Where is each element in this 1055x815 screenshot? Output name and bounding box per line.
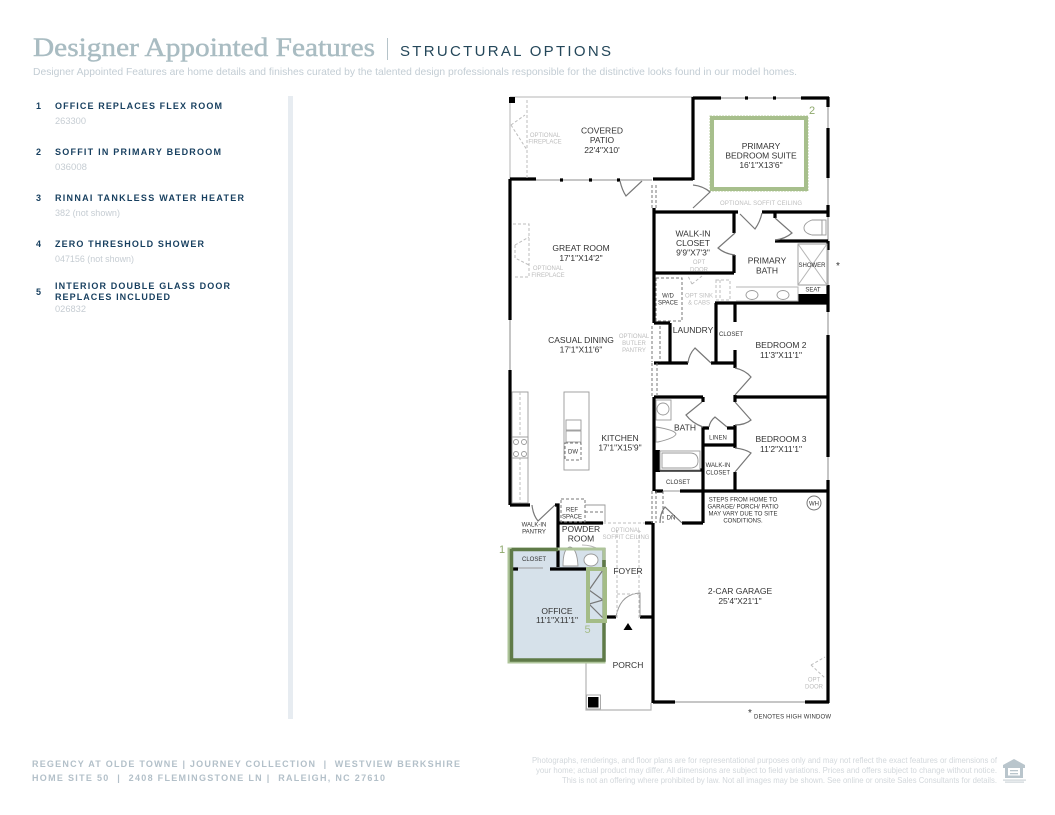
covered patio outline [510, 97, 693, 180]
room labels: PATIO [590, 135, 615, 145]
room labels: PRIMARY [742, 141, 781, 151]
option 5: 5 [36, 287, 41, 297]
footer: disclaimer: your home; actual product may differ. All dimensions are subject to field variations. Prices and offers subject to change without notice. [536, 765, 997, 775]
room labels: 16'1"X13'6" [739, 160, 783, 170]
room labels: KITCHEN [601, 433, 639, 443]
room labels: 11'1"X11'1" [536, 615, 578, 625]
room labels: BUTLER [622, 341, 647, 347]
title: Designer Appointed Features [33, 33, 375, 62]
option 5 highlight: double door [588, 569, 605, 621]
dashed optional walls [511, 100, 730, 618]
door swings [518, 181, 792, 617]
room labels: POWDER [562, 524, 600, 534]
room labels: 9'9"X7'3" [676, 248, 710, 258]
room labels: W/D [662, 294, 674, 300]
option 1: 1 [36, 101, 41, 111]
option 3: 3 [36, 193, 41, 203]
room labels: 2-CAR GARAGE [708, 586, 772, 596]
title separator [387, 38, 388, 60]
room labels: SHOWER [798, 263, 826, 269]
room labels: OFFICE [541, 606, 573, 616]
room labels: BATH [756, 266, 778, 276]
room labels: OPTIONAL [530, 133, 561, 139]
option 5 [36, 281, 230, 314]
footer: community and address: HOME SITE 50 | 2408 FLEMINGSTONE LN | RALEIGH, NC 27610 [32, 773, 385, 783]
water heater symbol: WH [809, 502, 819, 508]
room labels: PANTRY [522, 530, 546, 536]
room labels: OPTIONAL [533, 266, 564, 272]
room labels: GARAGE/ PORCH/ PATIO [707, 504, 779, 510]
room labels: OPTIONAL [611, 528, 642, 534]
room labels: SEAT [805, 288, 821, 294]
walls [509, 97, 829, 703]
footer: disclaimer: Photographs, renderings, and floor plans are for representational purposes only and may not reflect the exact features or dimensions of [532, 755, 998, 765]
option 4 [36, 239, 204, 264]
room labels: WALK-IN [522, 522, 546, 528]
soffit highlight: primary bedroom [710, 116, 808, 191]
room labels: 22'4"X10' [584, 145, 620, 155]
room labels: LINEN [709, 436, 727, 442]
option 4: ZERO THRESHOLD SHOWER [55, 239, 204, 249]
room labels: CONDITIONS. [723, 518, 763, 524]
room labels: FOYER [613, 566, 643, 576]
room labels: BEDROOM 3 [755, 434, 807, 444]
solid wall blocks [798, 294, 829, 304]
water heater symbol [807, 496, 821, 510]
room labels: CLOSET [676, 238, 710, 248]
room labels: PANTRY [622, 348, 646, 354]
room labels: DN [667, 516, 675, 522]
option 2 [36, 147, 221, 172]
option 5: 026832 [55, 304, 86, 314]
room labels: CLOSET [719, 332, 743, 338]
footer: community and address: REGENCY AT OLDE TOWNE | JOURNEY COLLECTION | WESTVIEW BERKSHIRE [32, 759, 460, 769]
room labels: ROOM [568, 534, 594, 544]
room labels: 11'3"X11'1" [760, 350, 802, 360]
folding office doors [589, 570, 603, 618]
section heading: STRUCTURAL OPTIONS [400, 43, 611, 60]
room labels: 11'2"X11'1" [760, 444, 802, 454]
room labels: DW [568, 450, 578, 456]
option 3 [36, 193, 244, 218]
room labels: REF [566, 508, 578, 514]
room labels: PORCH [613, 660, 643, 670]
room labels: BEDROOM SUITE [725, 150, 797, 160]
option markers: 2 [809, 105, 815, 117]
header [33, 33, 797, 78]
room labels: CLOSET [522, 557, 546, 563]
option 1: OFFICE REPLACES FLEX ROOM [55, 101, 222, 111]
room labels: COVERED [581, 126, 623, 136]
room labels: * [748, 708, 752, 719]
room labels: OPT SINK [685, 294, 713, 300]
room labels: BEDROOM 2 [755, 340, 807, 350]
room labels: WALK-IN [675, 228, 711, 238]
room labels [522, 126, 840, 720]
room labels: * [836, 261, 840, 272]
room labels: & CABS [688, 300, 710, 306]
option 2: 036008 [55, 162, 87, 172]
room labels: PRIMARY [748, 256, 787, 266]
footer: disclaimer [532, 755, 998, 785]
option markers: 5 [584, 624, 591, 636]
option 5: INTERIOR DOUBLE GLASS DOOR [55, 281, 230, 291]
panel: options list [36, 101, 244, 314]
room labels: MAY VARY DUE TO SITE [709, 512, 777, 518]
option markers [499, 105, 815, 636]
vertical panel divider [288, 96, 293, 719]
room labels: CASUAL DINING [548, 335, 614, 345]
room labels: 17'1"X11'6" [560, 344, 602, 354]
option markers: 1 [499, 544, 505, 556]
option 2: 2 [36, 147, 41, 157]
option 3: RINNAI TANKLESS WATER HEATER [55, 193, 244, 203]
room labels: OPT [808, 678, 820, 684]
porch outline [586, 663, 651, 710]
option 3: 382 (not shown) [55, 208, 120, 218]
room labels: WALK-IN [706, 463, 730, 469]
room labels: 17'1"X14'2" [559, 253, 603, 263]
option 1 highlight: office [509, 549, 604, 662]
room labels: SPACE [658, 300, 678, 306]
room labels: OPT [693, 260, 705, 266]
intro text: Designer Appointed Features are home details and finishes curated by the talented design professionals responsible for the distinctive looks found in our model homes. [33, 66, 797, 78]
icon: equal housing logo [1003, 759, 1026, 783]
room labels: OPTIONAL SOFFIT CEILING [720, 201, 802, 207]
room labels: OPTIONAL [619, 334, 650, 340]
option 4: 047156 (not shown) [55, 254, 134, 264]
room labels: LAUNDRY [673, 325, 714, 335]
option 1 [36, 101, 222, 126]
room labels: DENOTES HIGH WINDOW [754, 714, 831, 720]
room labels: FIREPLACE [528, 140, 562, 146]
room labels: CLOSET [706, 470, 730, 476]
option 1: 263300 [55, 116, 86, 126]
room labels: DOOR [690, 268, 709, 274]
room labels: 17'1"X15'9" [598, 442, 642, 452]
footer: disclaimer: This is not an offering where prohibited by law. Not all images may be shown. See online or onsite Sales Consultants for details. [562, 775, 997, 785]
room labels: CLOSET [666, 480, 690, 486]
room labels: GREAT ROOM [552, 243, 610, 253]
entry arrow [624, 623, 632, 630]
fixtures: baths [563, 220, 827, 618]
room labels: STEPS FROM HOME TO [709, 498, 778, 504]
office floor highlight [510, 549, 604, 662]
room labels: BATH [674, 422, 696, 432]
option 5: REPLACES INCLUDED [55, 292, 170, 302]
footer: community and address [32, 759, 460, 783]
floor plan [499, 97, 840, 720]
room labels: SOFFIT CEILING [603, 535, 650, 541]
exterior and interior windows [510, 98, 829, 702]
porch post [586, 695, 600, 709]
room labels: 25'4"X21'1" [718, 596, 762, 606]
option 2: SOFFIT IN PRIMARY BEDROOM [55, 147, 221, 157]
room labels: SPACE [562, 514, 582, 520]
option 4: 4 [36, 239, 41, 249]
room labels: FIREPLACE [531, 273, 565, 279]
opt garage door [811, 657, 825, 678]
fixtures: kitchen [512, 392, 605, 522]
room labels: DOOR [805, 684, 824, 690]
